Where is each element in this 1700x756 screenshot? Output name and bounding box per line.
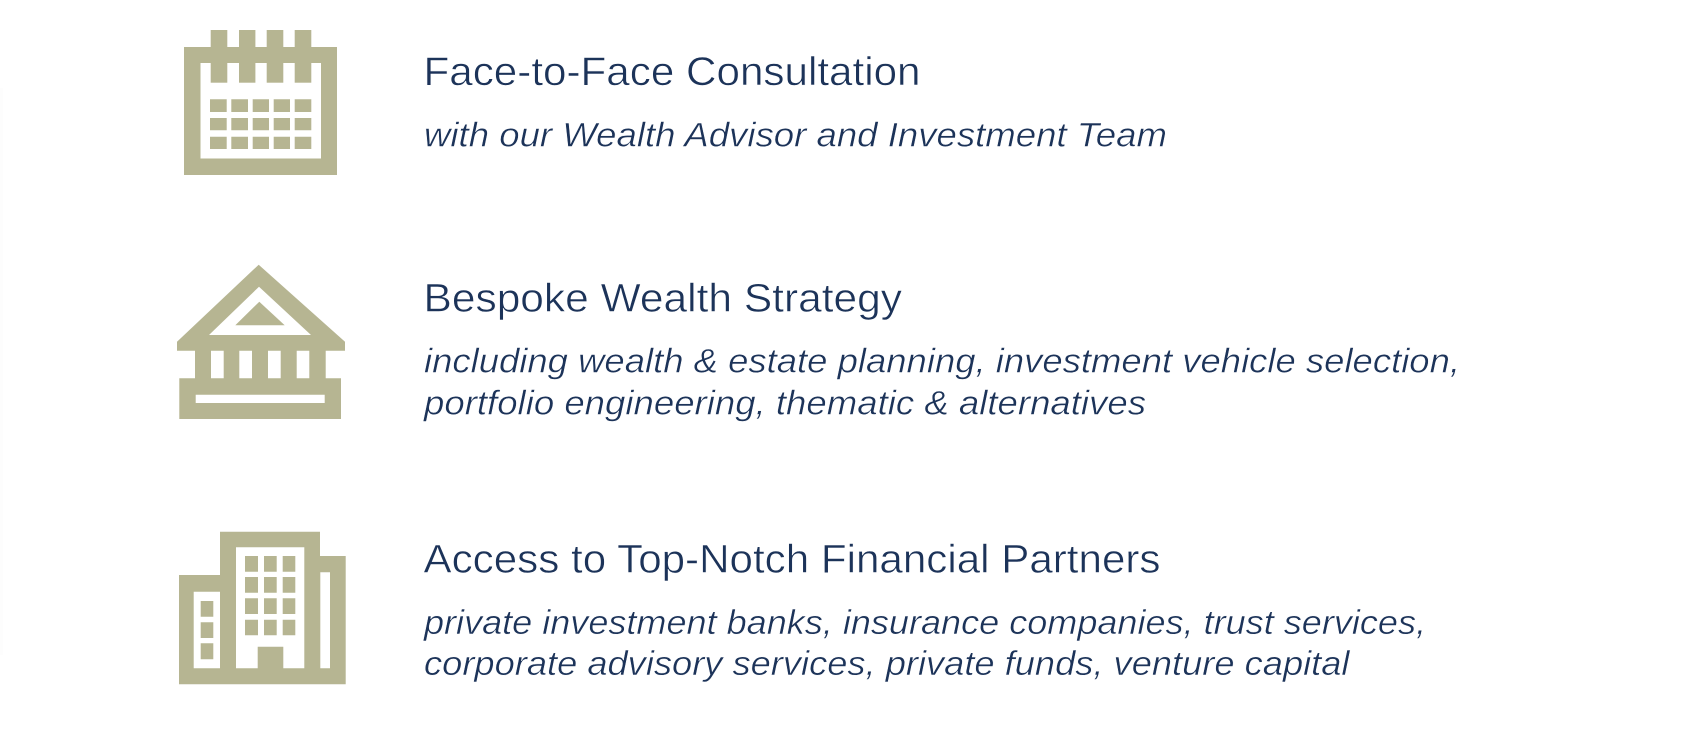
heading: Access to Top-Notch Financial Partners: Access to Top-Notch Financial Partners <box>424 538 1160 582</box>
text: consultation detail: with our Wealth Advisor and Investment Team <box>424 117 1167 155</box>
row: Access to Top-Notch Financial Partners <box>179 532 1426 684</box>
icon: bank building <box>177 265 345 419</box>
text: partners detail <box>423 604 1426 683</box>
icon: office buildings <box>179 532 346 684</box>
heading: Bespoke Wealth Strategy: Bespoke Wealth Strategy <box>424 277 902 321</box>
text: partners detail: private investment banks, insurance companies, trust services, <box>423 604 1426 642</box>
text: strategy detail: including wealth & estate planning, investment vehicle selection, <box>424 343 1460 381</box>
heading: Face-to-Face Consultation: Face-to-Face Consultation <box>424 50 920 94</box>
row: Face-to-Face Consultation <box>184 30 1167 175</box>
row: Bespoke Wealth Strategy <box>177 265 1460 422</box>
text: partners detail: corporate advisory services, private funds, venture capital <box>424 645 1351 683</box>
text: strategy detail <box>423 343 1460 422</box>
icon: calendar <box>184 30 337 175</box>
text: strategy detail: portfolio engineering, thematic & alternatives <box>423 384 1146 422</box>
